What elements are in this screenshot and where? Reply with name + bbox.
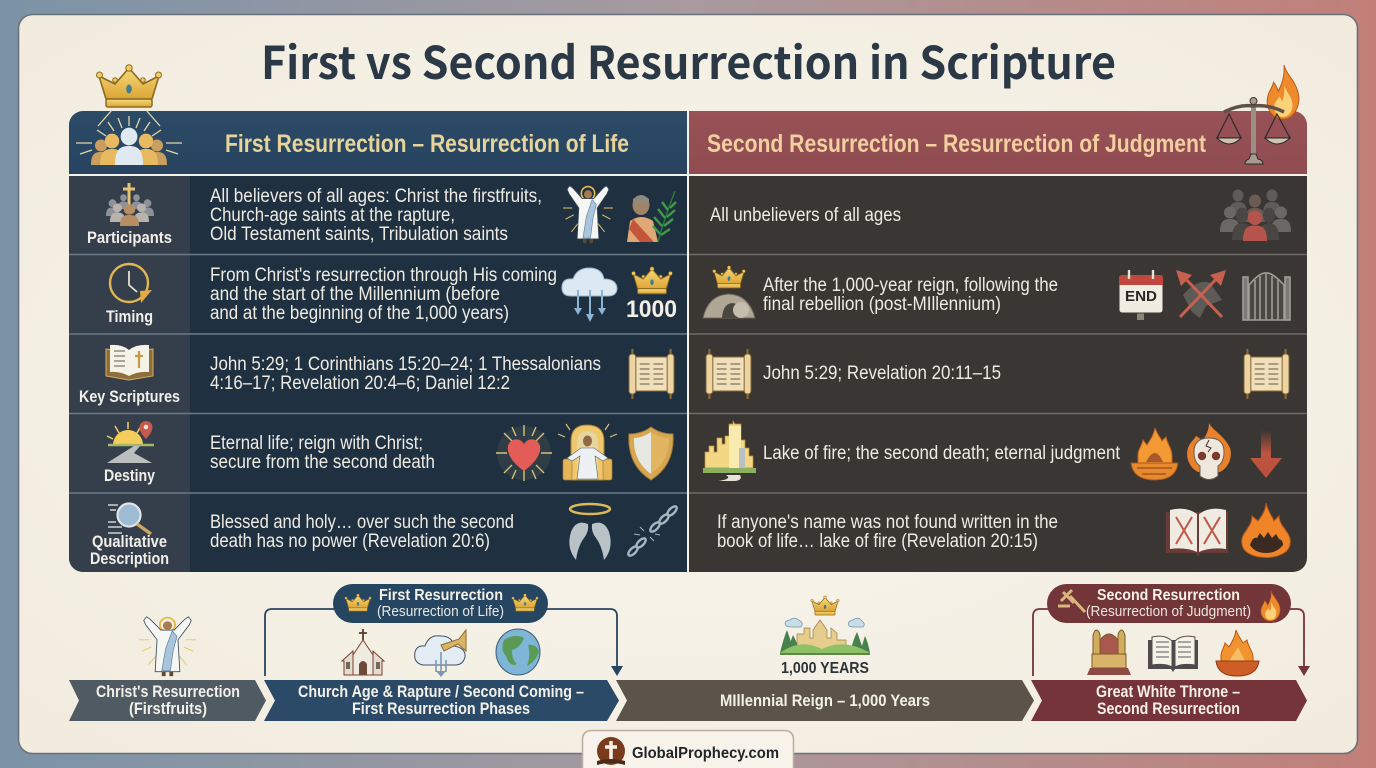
icon: destiny road with sunrise and pin xyxy=(107,421,154,463)
text: participants second: All unbelievers of all ages xyxy=(710,205,901,226)
arrow: christ's resurrection xyxy=(69,680,266,721)
heading: first resurrection: First Resurrection – Resurrection of Life xyxy=(225,130,629,158)
icon: crown 1000: 1000 xyxy=(626,296,677,323)
arrow: christ's resurrection: (Firstfruits) xyxy=(129,700,207,718)
arrow: christ's resurrection: Christ's Resurrection xyxy=(96,683,240,701)
icon: crossed arrows over defeated foe xyxy=(1176,270,1226,318)
text: description second: If anyone's name was not found written in the xyxy=(717,512,1058,533)
icon: closed gate xyxy=(1243,273,1290,320)
pill: second resurrection: Second Resurrection xyxy=(1097,587,1240,604)
label: participants: Participants xyxy=(87,229,172,247)
text: timing first: and at the beginning of the 1,000 years) xyxy=(210,303,509,324)
pill: second resurrection: (Resurrection of Judgment) xyxy=(1086,604,1251,620)
text: participants first: Old Testament saints, Tribulation saints xyxy=(210,224,508,245)
icon: crown 1000 xyxy=(626,267,677,323)
text: timing first: and the start of the Millennium (before xyxy=(210,284,500,305)
arrow: millennial reign xyxy=(616,680,1034,721)
icon: millennial city xyxy=(780,596,870,677)
icon: golden city xyxy=(703,421,756,481)
icon: magnifier over lines xyxy=(108,504,151,534)
icon: globe xyxy=(496,629,540,675)
text: description first: Blessed and holy… over such the second xyxy=(210,512,514,533)
icon: church xyxy=(342,629,384,675)
icon: participants cross and crowd xyxy=(106,183,154,226)
arrow: church age: Church Age & Rapture / Second Coming – xyxy=(298,683,584,701)
text: description first xyxy=(210,512,514,552)
text: timing second: final rebellion (post-MIllennium) xyxy=(763,294,1001,315)
icon: group of unbelievers xyxy=(1220,189,1291,241)
title: First vs Second Resurrection in Scripture xyxy=(261,27,1116,92)
icon: christ enthroned xyxy=(558,424,617,480)
pill: first resurrection: First Resurrection xyxy=(379,587,503,604)
text: timing first xyxy=(210,265,557,324)
label: qualitative description: Qualitative xyxy=(92,533,167,551)
text: participants first xyxy=(210,186,542,245)
icon: cloud with descending arrows xyxy=(562,268,617,322)
icon: shield xyxy=(629,427,673,480)
icon: crown over radiant people xyxy=(76,65,182,165)
label: timing: Timing xyxy=(106,308,153,326)
heading: second resurrection: Second Resurrection – Resurrection of Judgment xyxy=(707,130,1207,158)
arrow: great white throne: Great White Throne – xyxy=(1096,683,1240,701)
arrow: great white throne xyxy=(1031,680,1307,721)
arrow: church age xyxy=(264,680,619,721)
text: timing second: After the 1,000-year reign, following the xyxy=(763,275,1058,296)
icon: lake of fire timeline xyxy=(1216,630,1259,676)
text: scriptures first xyxy=(210,354,601,394)
arrow: church age: First Resurrection Phases xyxy=(352,700,530,718)
icon: cloud and trumpet xyxy=(415,630,466,677)
icon: cross logo xyxy=(597,737,625,765)
arrow: great white throne: Second Resurrection xyxy=(1097,700,1240,718)
icon: lake of fire xyxy=(1131,428,1178,480)
label: destiny: Destiny xyxy=(104,467,156,485)
text: description first: death has no power (Revelation 20:6) xyxy=(210,531,490,552)
text: participants first: Church-age saints at the rapture, xyxy=(210,205,455,226)
icon: open book xyxy=(1148,636,1198,672)
icon: book with crossed out names xyxy=(1166,509,1228,557)
icon: timeline risen christ xyxy=(139,617,196,676)
label: 1,000 years: 1,000 YEARS xyxy=(781,660,869,677)
text: scriptures first: John 5:29; 1 Corinthians 15:20–24; 1 Thessalonians xyxy=(210,354,601,375)
icon: open book with cross xyxy=(106,345,153,380)
icon: down arrow xyxy=(1250,430,1282,478)
icon: crown over empty tomb xyxy=(703,266,755,318)
label: qualitative description: Description xyxy=(90,550,169,568)
icon: end calendar sign: END xyxy=(1125,288,1157,305)
row labels xyxy=(79,229,180,568)
icon: clock xyxy=(110,264,152,303)
text: timing second xyxy=(763,275,1058,315)
text: scriptures first: 4:16–17; Revelation 20:4–6; Daniel 12:2 xyxy=(210,373,510,394)
bracket: first resurrection xyxy=(265,609,623,676)
timeline xyxy=(69,680,1307,721)
text: scriptures second: John 5:29; Revelation 20:11–15 xyxy=(763,363,1001,384)
text: destiny first: secure from the second death xyxy=(210,452,435,473)
bracket: second resurrection xyxy=(1033,609,1310,676)
icon: risen christ xyxy=(563,186,613,243)
pill: first resurrection xyxy=(333,584,548,623)
logo tab xyxy=(582,730,794,768)
text: timing first: From Christ's resurrection through His coming xyxy=(210,265,557,286)
icon: scales of judgment with flame xyxy=(1217,65,1299,164)
icon: broken chain xyxy=(627,505,678,557)
text: description second: book of life… lake of fire (Revelation 20:15) xyxy=(717,531,1038,552)
text: destiny first xyxy=(210,433,435,473)
text: destiny first: Eternal life; reign with Christ; xyxy=(210,433,423,454)
text: description second xyxy=(717,512,1058,552)
icon: scroll second right xyxy=(1244,349,1289,399)
icon: end calendar sign xyxy=(1119,270,1163,320)
icon: throne xyxy=(1087,630,1131,675)
icon: flaming skull xyxy=(1187,423,1231,480)
arrow: millennial reign: MIllennial Reign – 1,000 Years xyxy=(720,692,930,710)
text: site name: GlobalProphecy.com xyxy=(632,745,779,762)
text: destiny second: Lake of fire; the second death; eternal judgment xyxy=(763,443,1121,464)
text: participants first: All believers of all ages: Christ the firstfruits, xyxy=(210,186,542,207)
icon: scroll second left xyxy=(706,349,751,399)
icon: halo and wings xyxy=(569,504,611,560)
pill: second resurrection xyxy=(1047,584,1291,623)
comparison table xyxy=(69,111,1307,572)
pill: first resurrection: (Resurrection of Life) xyxy=(377,604,504,620)
icon: glowing heart xyxy=(496,425,552,481)
icon: ring of fire xyxy=(1242,503,1290,558)
icon: saint with palm xyxy=(627,191,676,242)
icon: scroll first xyxy=(629,349,674,399)
label: key scriptures: Key Scriptures xyxy=(79,388,180,406)
